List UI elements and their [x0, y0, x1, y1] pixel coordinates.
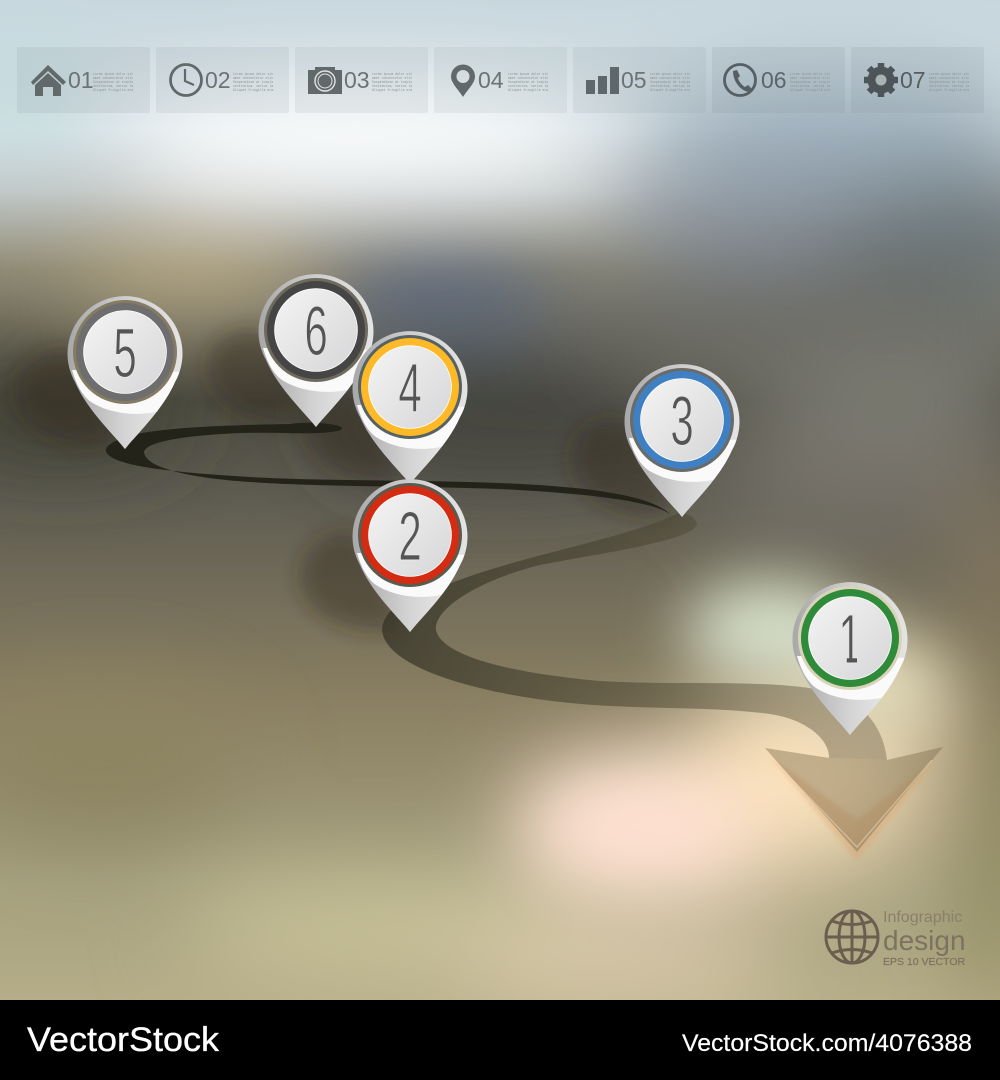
- panel 02: clock: Suspendisse at turpis: [233, 80, 273, 84]
- panel 01: home: [17, 47, 150, 113]
- panel 01: home: vestibulum, varius la: [93, 84, 133, 88]
- panel 03: camera: Lorem ipsum dolor sit: [372, 72, 412, 76]
- panel 03: camera: Suspendisse at turpis: [372, 80, 412, 84]
- panel 07: settings: Suspendisse at turpis: [929, 80, 969, 84]
- panel 05: bars: Suspendisse at turpis: [650, 80, 690, 84]
- panel 04: location: vestibulum, varius la: [508, 84, 548, 88]
- logo: infographic design: Infographic: [883, 909, 962, 926]
- logo: infographic design: [826, 909, 966, 968]
- pin shadows: [15, 329, 672, 631]
- panel 01: home: Aliquet fringilla era: [93, 88, 133, 92]
- pin 4: [350, 331, 472, 487]
- panel 01: home: 01: [68, 67, 94, 93]
- panel 04: location: amet consectetur elit: [508, 76, 548, 80]
- panel 03: camera: amet consectetur elit: [372, 76, 412, 80]
- panel 07: settings: amet consectetur elit: [929, 76, 969, 80]
- pin 2: 2: [398, 498, 422, 576]
- route: thin upper path: [106, 423, 672, 516]
- panel 06: phone: Lorem ipsum dolor sit: [790, 72, 830, 76]
- panel 04: location: Suspendisse at turpis: [508, 80, 548, 84]
- panel 05: bars: amet consectetur elit: [650, 76, 690, 80]
- panel 05: bars: Lorem ipsum dolor sit: [650, 72, 690, 76]
- icon: gear: [864, 63, 898, 97]
- panel 06: phone: Suspendisse at turpis: [790, 80, 830, 84]
- icon: clock: [170, 64, 202, 96]
- panel 03: camera: vestibulum, varius la: [372, 84, 412, 88]
- panel 06: phone: vestibulum, varius la: [790, 84, 830, 88]
- panel 04: location: Lorem ipsum dolor sit: [508, 72, 548, 76]
- arrow head: [765, 747, 943, 861]
- panel 03: camera: [295, 47, 428, 113]
- pin 5: [65, 296, 187, 452]
- pin 5: 5: [113, 315, 137, 393]
- panel 03: camera: Aliquet fringilla era: [372, 88, 412, 92]
- panel 06: phone: [712, 47, 845, 113]
- pin 1: [790, 582, 912, 738]
- pin 3: [622, 364, 744, 520]
- panel 07: settings: vestibulum, varius la: [929, 84, 969, 88]
- panel 07: settings: 07: [900, 67, 926, 93]
- logo: infographic design: EPS 10 VECTOR: [883, 956, 966, 968]
- panel 06: phone: Aliquet fringilla era: [790, 88, 830, 92]
- icon: bar chart: [586, 67, 619, 94]
- pin 6: 6: [304, 293, 328, 371]
- panel 02: clock: amet consectetur elit: [233, 76, 273, 80]
- panel 06: phone: 06: [761, 67, 787, 93]
- pin 3: 3: [670, 383, 694, 461]
- pin 2: [350, 479, 472, 635]
- panel 01: home: Suspendisse at turpis: [93, 80, 133, 84]
- panel 02: clock: [156, 47, 289, 113]
- panel 05: bars: [573, 47, 706, 113]
- panel 07: settings: Aliquet fringilla era: [929, 88, 969, 92]
- pin 6: [256, 274, 378, 430]
- pin 1: 1: [838, 601, 862, 679]
- panel 01: home: Lorem ipsum dolor sit: [93, 72, 133, 76]
- route: wide lower path: [382, 514, 887, 760]
- panel 02: clock: vestibulum, varius la: [233, 84, 273, 88]
- panel 06: phone: amet consectetur elit: [790, 76, 830, 80]
- panel 01: home: amet consectetur elit: [93, 76, 133, 80]
- panel 04: location: [434, 47, 567, 113]
- panel 04: location: 04: [478, 67, 504, 93]
- panel 02: clock: Aliquet fringilla era: [233, 88, 273, 92]
- footer url: VectorStock.com/4076388: [682, 1030, 972, 1057]
- icon: globe: [826, 911, 878, 963]
- toolbar panels: [17, 47, 984, 113]
- panel 07: settings: [851, 47, 984, 113]
- panel 05: bars: Aliquet fringilla era: [650, 88, 690, 92]
- logo: infographic design: design: [883, 925, 966, 956]
- icon: camera: [308, 67, 342, 94]
- panel 05: bars: vestibulum, varius la: [650, 84, 690, 88]
- panel 03: camera: 03: [344, 67, 370, 93]
- panel 04: location: Aliquet fringilla era: [508, 88, 548, 92]
- panel 02: clock: 02: [205, 67, 231, 93]
- footer brand: VectorStock: [27, 1021, 220, 1059]
- icon: map pin: [451, 64, 475, 97]
- panel 02: clock: Lorem ipsum dolor sit: [233, 72, 273, 76]
- icon: house: [31, 65, 66, 96]
- panel 07: settings: Lorem ipsum dolor sit: [929, 72, 969, 76]
- footer bar: [0, 1000, 1000, 1080]
- pin 4: 4: [398, 350, 422, 428]
- panel 05: bars: 05: [621, 67, 647, 93]
- icon: phone: [724, 64, 756, 96]
